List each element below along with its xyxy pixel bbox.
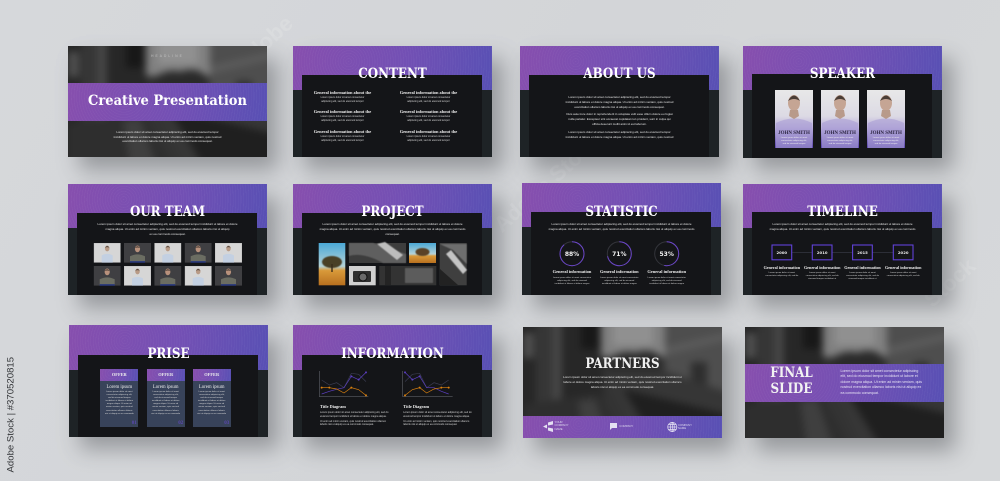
- intro text: magna aliqua. Ut enim ad minim veniam, quis nostrud exercitation ullamco laboris nisi ut aliquip ex ea commodo: [549, 227, 694, 231]
- list text: [320, 115, 364, 122]
- timeline track: 2010: [817, 250, 828, 255]
- panel: information slide: [293, 325, 492, 437]
- logo: your company name: COMPANY: [554, 423, 568, 427]
- title: [770, 365, 812, 397]
- title: CONTENT: [358, 66, 427, 82]
- offer card 2: 02: [178, 420, 183, 426]
- stat 2 text: adipiscing elit, sed do eiusmod: [604, 280, 634, 282]
- timeline text 1: Lorem ipsum dolor sit amet: [769, 272, 795, 274]
- list item: General information about the: [400, 128, 457, 134]
- timeline text 3: Lorem ipsum dolor sit amet: [849, 272, 876, 274]
- timeline text 2: Lorem ipsum dolor sit amet: [809, 272, 835, 274]
- intro text: [548, 222, 694, 231]
- body text: labore et dolore magna aliqua. Ut enim ad minim veniam, quis nostrud exercitation ullamco: [563, 380, 682, 384]
- offer card 1: minim veniam, quis nostrud: [106, 406, 133, 408]
- offer card 3: sed do eiusmod tempor: [200, 397, 223, 399]
- body text: [114, 130, 222, 143]
- panel: our team slide: [68, 184, 267, 295]
- timeline text 4: Lorem ipsum dolor sit amet: [890, 272, 916, 274]
- header band: [68, 184, 267, 228]
- stat 2 text: [600, 276, 638, 285]
- speaker card 1: [775, 90, 813, 148]
- body text: Lorem ipsum dolor sit amet consectetur adipiscing: [840, 369, 918, 373]
- chart 1 text: Ut enim ad minim veniam, quis nostrud exercitation ullamco: [320, 420, 386, 423]
- list item: General information about the: [314, 128, 371, 134]
- offer card 1: magna aliqua. Ut enim ad: [107, 403, 132, 405]
- inner panel: [302, 213, 482, 295]
- offer card 3: nisi ut aliquip ex ea commodo: [197, 413, 226, 415]
- list item: General information about the: [314, 109, 371, 114]
- inner panel: [531, 212, 711, 295]
- logo: company: [610, 423, 634, 430]
- inner panel: [752, 74, 932, 158]
- donut charts: 88%: [565, 251, 579, 258]
- timeline label 4: General information: [885, 265, 921, 270]
- timeline text 1: consectetur adipiscing elit, sed do: [765, 275, 798, 277]
- timeline label 1: General information: [764, 265, 800, 270]
- speaker card 2: Lorem ipsum dolor sit amet: [827, 136, 853, 138]
- list item: General information about the: [314, 90, 371, 94]
- offer card 2: nisi ut aliquip ex ea commodo: [151, 413, 180, 415]
- stock id text: Adobe Stock | #370520815: [6, 357, 16, 472]
- logo: your company name: YOUR: [554, 420, 563, 424]
- background photo: [523, 327, 722, 416]
- list text: adipiscing elit, sed do eiusmod tempor: [407, 138, 450, 142]
- title: PARTNERS: [585, 356, 660, 372]
- intro text: Lorem ipsum dolor sit amet consectetur adipiscing elit, sed do eiusmod tempor incididunt ut labore et dolore: [323, 222, 462, 226]
- paragraph 2: officia deserunt mollit anim id est laborum.: [592, 122, 647, 126]
- logo: company name globe: NAME: [678, 426, 686, 430]
- speaker card 3: sed do eiusmod tempor: [875, 143, 897, 145]
- team photo grid: [94, 243, 242, 286]
- intro text: magna aliqua. Ut enim ad minim veniam, quis nostrud exercitation ullamco laboris nisi ut aliquip: [105, 227, 230, 231]
- timeline text 2: consectetur adipiscing elit, sed do: [806, 275, 839, 277]
- watermark: Adobe: [230, 10, 298, 75]
- stat 2 text: incididunt ut labore et dolore magna: [602, 283, 637, 285]
- intro text: [98, 222, 238, 236]
- chart 1 text: eiusmod tempor incididunt ut labore et dolore magna aliqua.: [320, 415, 386, 418]
- offer card 2: Lorem ipsum dolor sit amet: [152, 391, 179, 393]
- stat 1 text: adipiscing elit, sed do eiusmod: [557, 280, 587, 282]
- donut charts: 53%: [660, 251, 674, 258]
- timeline text 3: eiusmod tempor incididunt ut: [849, 278, 876, 280]
- logo: company: COMPANY: [619, 424, 633, 428]
- stat 3 text: [648, 276, 686, 285]
- stat 1 text: [553, 276, 591, 285]
- offer card 3: [193, 369, 231, 427]
- intro text: Lorem ipsum dolor sit amet consectetur adipiscing elit, sed do eiusmod tempor incididunt ut labore et dolore: [552, 222, 691, 226]
- offer card 3: Lorem ipsum: [199, 384, 225, 390]
- timeline track: 2000: [777, 250, 787, 255]
- offer card 2: incididunt ut labore et dolore: [152, 400, 179, 402]
- list text: Lorem ipsum dolor sit amet consectetur: [321, 96, 364, 98]
- paragraph 2: nulla pariatur. Excepteur sint occaecat cupidatat non proident, sunt in culpa qui: [568, 116, 671, 120]
- panel: final slide: [745, 327, 944, 438]
- body text: exercitation ullamco laboris nisi ut aliquip ex ea commodo consequat.: [122, 139, 213, 143]
- offer card 2: Lorem ipsum: [153, 384, 179, 390]
- list text: Lorem ipsum dolor sit amet consectetur: [407, 115, 450, 118]
- offer card 1: Lorem ipsum: [106, 384, 132, 390]
- intro text: magna aliqua. Ut enim ad minim veniam, quis nostrud exercitation ullamco laboris nisi ut aliquip ex ea commodo: [770, 227, 915, 231]
- list text: [320, 134, 364, 142]
- stat 3 label: General information: [647, 269, 686, 274]
- title: PROJECT: [361, 204, 424, 220]
- speaker card 1: Lorem ipsum dolor sit amet: [781, 136, 807, 138]
- offer card 3: 03: [224, 420, 229, 426]
- offer card 3: consectetur adipiscing elit,: [199, 394, 225, 396]
- offer card 3: Lorem ipsum dolor sit amet: [198, 391, 225, 393]
- title: SLIDE: [770, 381, 812, 397]
- body text: Lorem ipsum dolor sit amet consectetur adipiscing elit, sed do eiusmod tempor incididunt ut: [563, 375, 682, 379]
- offer card 2: [147, 369, 185, 427]
- panel: timeline slide: [743, 184, 942, 295]
- offer card 1: Lorem ipsum dolor sit amet: [106, 391, 132, 393]
- list item: General information about the: [400, 109, 457, 114]
- list text: [406, 115, 450, 122]
- chart 1 text: [320, 411, 388, 426]
- speaker card 1: consectetur adipiscing elit,: [781, 140, 807, 142]
- stat 3 text: Lorem ipsum dolor sit amet consectetur: [648, 277, 686, 279]
- header band: [293, 46, 492, 90]
- chart 2 text: eiusmod tempor incididunt ut labore et dolore magna aliqua.: [403, 415, 470, 418]
- list text: adipiscing elit, sed do eiusmod tempor: [407, 119, 450, 122]
- header band: [293, 325, 492, 370]
- logo: your company name: NAME: [554, 427, 563, 431]
- panel: project slide: [293, 184, 492, 295]
- speaker card 2: consectetur adipiscing elit,: [827, 140, 853, 142]
- speaker card 3: Lorem ipsum dolor sit amet: [873, 136, 899, 138]
- offer card 1: incididunt ut labore et dolore: [106, 400, 133, 402]
- offer card 2: exercitation ullamco laboris: [152, 410, 179, 412]
- body text: Lorem ipsum dolor sit amet consectetur adipiscing elit, sed do eiusmod tempor: [116, 130, 219, 134]
- timeline text 4: consectetur adipiscing elit, sed do: [887, 275, 920, 277]
- intro text: Lorem ipsum dolor sit amet consectetur adipiscing elit, sed do eiusmod tempor incididunt ut labore et dolore: [98, 222, 237, 226]
- timeline track: 2020: [898, 250, 909, 255]
- offer card 2: OFFER: [158, 372, 173, 377]
- offer card 1: [100, 369, 138, 427]
- logo: company name globe: [667, 422, 692, 432]
- partner band: [523, 416, 722, 438]
- stat 1 text: Lorem ipsum dolor sit amet consectetur: [553, 277, 591, 279]
- intro text: [770, 222, 916, 231]
- list text: [406, 134, 450, 142]
- header band: [293, 184, 492, 228]
- stat 2 label: General information: [600, 269, 639, 274]
- chart 1 text: laboris nisi ut aliquip ex ea commodo consequat.: [320, 423, 374, 426]
- speaker card 2: JOHN SMITH: [824, 130, 856, 136]
- body text: nostrud exercitation ullamco laboris nisi ut aliquip ex: [840, 385, 921, 389]
- intro text: consequat.: [385, 232, 400, 236]
- inner panel: [302, 355, 482, 437]
- speaker card 1: sed do eiusmod tempor: [783, 143, 805, 145]
- title: TIMELINE: [807, 204, 878, 220]
- chart 2 text: Lorem ipsum dolor sit amet consectetur adipiscing elit, sed do: [403, 411, 472, 414]
- chart 1 title: Title Diagram: [320, 404, 346, 409]
- title: OUR TEAM: [130, 204, 205, 220]
- project photo collage: [318, 241, 468, 286]
- timeline label 2: General information: [804, 265, 840, 270]
- list text: [406, 96, 450, 102]
- timeline label 3: General information: [844, 265, 881, 270]
- timeline track: 2015: [857, 250, 868, 255]
- panel: speaker slide: [743, 46, 942, 158]
- list text: adipiscing elit, sed do eiusmod tempor: [407, 100, 450, 102]
- timeline text 3: consectetur adipiscing elit, sed do: [846, 275, 879, 277]
- list text: Lorem ipsum dolor sit amet consectetur: [407, 134, 450, 138]
- donut charts: [560, 241, 680, 266]
- timeline track: [771, 244, 914, 260]
- offer card 2: consectetur adipiscing elit,: [153, 394, 179, 396]
- list text: Lorem ipsum dolor sit amet consectetur: [321, 115, 364, 118]
- header band: [743, 46, 942, 90]
- panel: about us slide: [520, 46, 719, 157]
- inner panel: [302, 75, 482, 157]
- offer card 1: 01: [132, 420, 137, 426]
- offer card 3: incididunt ut labore et dolore: [198, 400, 225, 402]
- title: SPEAKER: [810, 66, 875, 82]
- timeline text 2: eiusmod tempor incididunt ut: [808, 278, 836, 280]
- body text: ea commodo consequat.: [840, 391, 879, 395]
- panel: partners slide: [523, 327, 722, 438]
- inner panel: [752, 212, 932, 295]
- header band: [520, 46, 719, 90]
- chart 2 text: laboris nisi ut aliquip ex ea commodo consequat.: [403, 423, 457, 426]
- stat 1 text: incididunt ut labore et dolore magna: [555, 283, 589, 285]
- header band: [743, 184, 942, 228]
- line charts: [319, 371, 453, 397]
- inner panel: [77, 213, 257, 295]
- offer card 1: exercitation ullamco laboris: [106, 410, 132, 412]
- paragraph 1: [566, 94, 674, 108]
- paragraph 3: Lorem ipsum dolor sit amet consectetur adipiscing elit, sed do eiusmod tempor: [568, 130, 671, 134]
- intro text: [320, 222, 466, 236]
- paragraph 1: Lorem ipsum dolor sit amet consectetur adipiscing elit, sed do eiusmod tempor: [568, 94, 671, 98]
- donut charts: 71%: [612, 251, 626, 258]
- panel: creative presentation slide: [68, 46, 267, 157]
- timeline text 4: [886, 272, 920, 277]
- purple band: [68, 83, 267, 121]
- timeline text 1: [765, 272, 798, 277]
- title: ABOUT US: [583, 66, 656, 82]
- chart 2 text: Ut enim ad minim veniam, quis nostrud exercitation ullamco: [403, 420, 469, 423]
- speaker card 2: sed do eiusmod tempor: [829, 143, 851, 145]
- stat 2 text: Lorem ipsum dolor sit amet consectetur: [600, 277, 638, 279]
- speaker card 1: JOHN SMITH: [778, 130, 810, 136]
- paragraph 1: exercitation ullamco laboris nisi ut aliquip ex ea commodo consequat.: [574, 104, 665, 108]
- list item: General information about the: [400, 90, 457, 94]
- body text: [563, 375, 682, 389]
- logo: your company name: [543, 420, 568, 432]
- watermark: Adobe Stock: [489, 128, 605, 237]
- paragraph 2: [566, 112, 673, 126]
- paragraph 3: incididunt ut labore et dolore magna aliqua. Ut enim ad minim veniam, quis nostrud: [566, 134, 673, 138]
- panel: statistic slide: [522, 183, 721, 295]
- inner panel: [529, 75, 709, 157]
- speaker card 3: JOHN SMITH: [870, 130, 902, 136]
- timeline text 2: [806, 272, 839, 280]
- background photo: [68, 46, 267, 157]
- header band: [522, 183, 721, 227]
- header band: [69, 325, 268, 370]
- list text: Lorem ipsum dolor sit amet consectetur: [321, 134, 364, 138]
- inner panel: [78, 355, 258, 437]
- speaker card 3: consectetur adipiscing elit,: [873, 140, 899, 142]
- offer card 1: nisi ut aliquip ex ea commodo: [105, 413, 134, 415]
- body text: [840, 369, 922, 395]
- title: FINAL: [770, 365, 812, 381]
- headline label: HEADLINE: [151, 54, 184, 58]
- offer card 2: minim veniam, quis nostrud: [152, 406, 179, 408]
- stat 3 text: incididunt ut labore et dolore magna: [649, 283, 684, 285]
- offer card 1: consectetur adipiscing elit,: [106, 394, 132, 396]
- offer card 3: minim veniam, quis nostrud: [198, 406, 225, 408]
- list text: adipiscing elit, sed do eiusmod tempor: [321, 138, 364, 142]
- paragraph 2: Duis aute irure dolor in reprehenderit in voluptate velit esse cillum dolore eu fugiat: [566, 112, 673, 116]
- offer card 2: magna aliqua. Ut enim ad: [153, 403, 178, 405]
- paragraph 1: incididunt ut labore et dolore magna aliqua. Ut enim ad minim veniam, quis nostrud: [566, 100, 673, 104]
- offer card 3: OFFER: [204, 372, 219, 377]
- body text: laboris nisi ut aliquip ex ea commodo consequat.: [591, 385, 654, 389]
- stat 1 label: General information: [553, 269, 591, 274]
- timeline text 3: [846, 272, 879, 280]
- speaker card 2: [821, 90, 859, 148]
- offer card 3: magna aliqua. Ut enim ad: [199, 403, 224, 405]
- list text: adipiscing elit, sed do eiusmod tempor: [321, 100, 364, 102]
- title: INFORMATION: [341, 346, 444, 362]
- chart 1 text: Lorem ipsum dolor sit amet consectetur adipiscing elit, sed do: [320, 411, 388, 414]
- body text: elit, sed do eiusmod tempor incididunt ut labore et: [840, 374, 918, 378]
- watermark: Stock: [919, 253, 980, 312]
- offer card 2: sed do eiusmod tempor: [154, 397, 177, 399]
- offer card 1: OFFER: [112, 372, 127, 377]
- title: Creative Presentation: [88, 93, 247, 109]
- intro text: Lorem ipsum dolor sit amet consectetur adipiscing elit, sed do eiusmod tempor incididunt ut labore et dolore: [773, 222, 912, 226]
- offer card 1: sed do eiusmod tempor: [108, 397, 131, 399]
- paragraph 3: [566, 130, 674, 138]
- list text: adipiscing elit, sed do eiusmod tempor: [321, 119, 364, 122]
- title: STATISTIC: [585, 204, 658, 220]
- panel: content slide: [293, 46, 492, 157]
- title: PRISE: [147, 346, 190, 362]
- background photo: [745, 327, 944, 438]
- body text: dolore magna aliqua. Ut enim ad minim veniam, quis: [840, 380, 922, 384]
- purple band: [745, 364, 944, 402]
- list text: Lorem ipsum dolor sit amet consectetur: [407, 96, 450, 98]
- offer card 3: exercitation ullamco laboris: [198, 410, 225, 412]
- speaker card 3: [867, 90, 905, 148]
- intro text: ex ea commodo consequat.: [149, 232, 186, 236]
- chart 2 text: [403, 411, 472, 426]
- body text: incididunt ut labore et dolore magna aliqua. Ut enim ad minim veniam, quis nostrud: [114, 135, 221, 139]
- logo: company name globe: COMPANY: [678, 422, 692, 426]
- panel: prise slide: [69, 325, 268, 437]
- chart 2 title: Title Diagram: [403, 404, 429, 409]
- stat 3 text: adipiscing elit, sed do eiusmod: [652, 280, 682, 282]
- list text: [320, 96, 364, 102]
- intro text: magna aliqua. Ut enim ad minim veniam, quis nostrud exercitation ullamco laboris nisi ut aliquip ex ea commodo: [320, 227, 465, 231]
